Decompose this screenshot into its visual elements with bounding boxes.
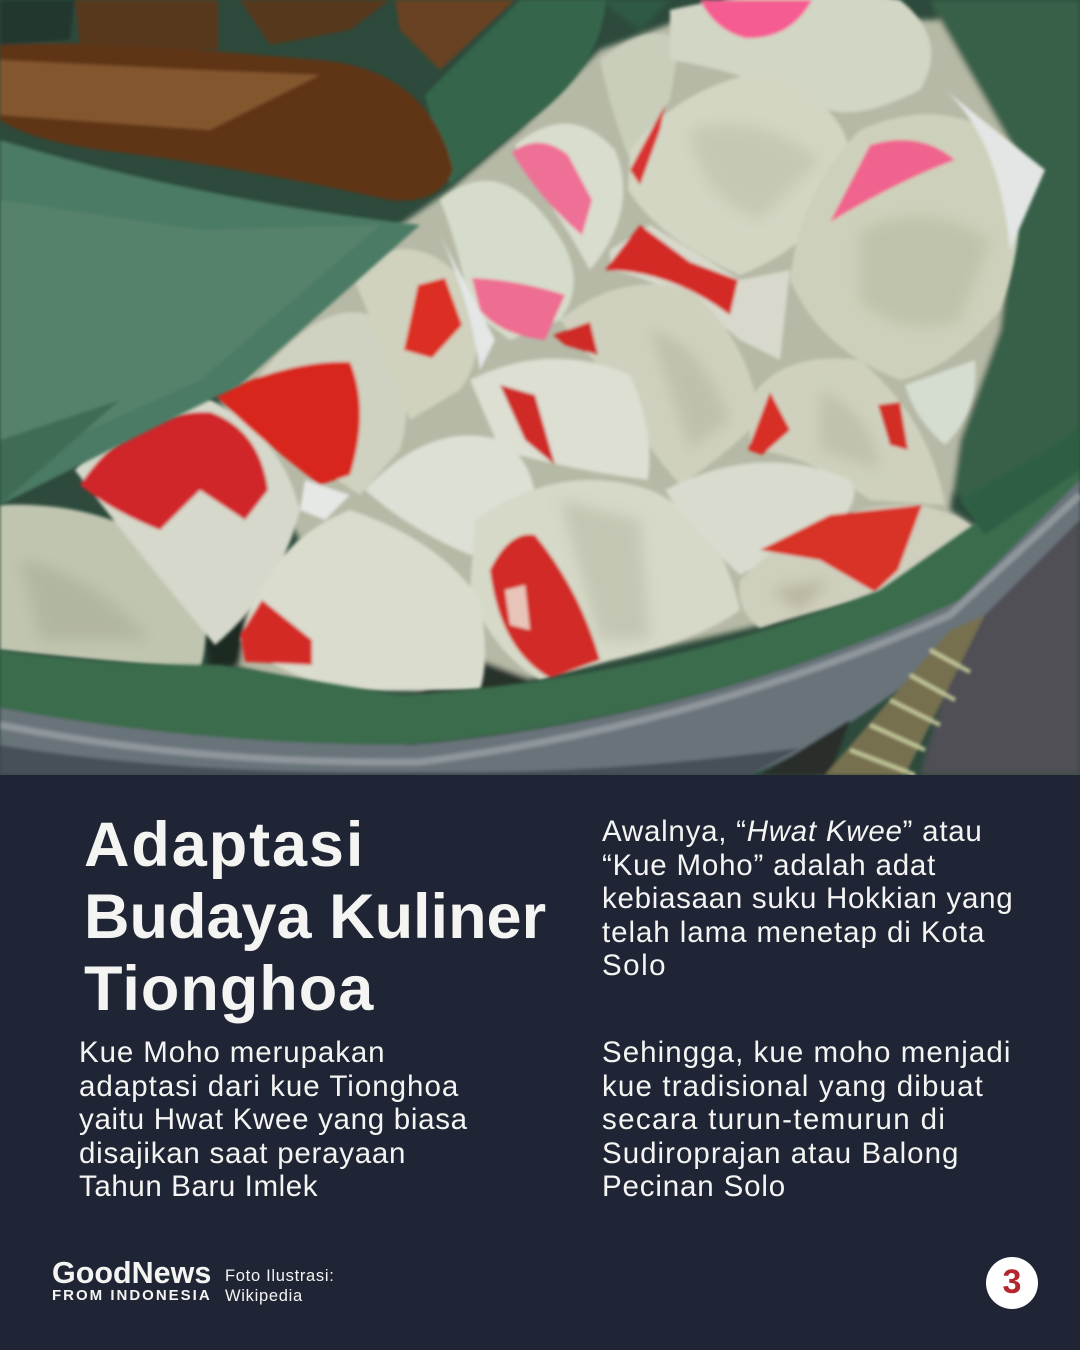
text: left paragraph [79, 1036, 468, 1203]
fried dough [0, 43, 453, 201]
logo: GoodNews from Indonesia: FROM INDONESIA [52, 1287, 212, 1304]
underfill between cakes [210, 20, 1020, 690]
text: right paragraph top [602, 815, 1013, 982]
text: right paragraph top: Solo [602, 949, 667, 982]
text: left paragraph: yaitu Hwat Kwee yang biasa [79, 1103, 468, 1136]
logo: GoodNews from Indonesia: GoodNews [52, 1256, 211, 1290]
photo: kue moho cakes in a banana leaf basket [0, 0, 1080, 775]
photo credit [225, 1267, 335, 1305]
text: right paragraph bottom: Sudiroprajan atau Balong [602, 1136, 959, 1170]
leaf bottom [0, 450, 1080, 745]
text: left paragraph: Tahun Baru Imlek [79, 1170, 318, 1203]
text: right paragraph bottom: secara turun-temurun di [602, 1103, 946, 1136]
page number badge [986, 1257, 1038, 1309]
text: right paragraph bottom: kue tradisional yang dibuat [602, 1070, 984, 1102]
cake shading [20, 124, 990, 640]
page number badge: 3 [1003, 1263, 1021, 1301]
text: right paragraph top: Awalnya, “Hwat Kwee” atau [602, 815, 983, 848]
text: right paragraph bottom: Sehingga, kue moho menjadi [602, 1036, 1011, 1069]
text: right paragraph top: kebiasaan suku Hokkian yang [602, 882, 1013, 915]
photo credit: Foto Ilustrasi: [225, 1267, 335, 1285]
photo credit: Wikipedia [225, 1287, 303, 1305]
title: Budaya Kuliner [84, 882, 546, 952]
text: right paragraph bottom: Pecinan Solo [602, 1170, 786, 1203]
cakes [0, 0, 1045, 690]
title [84, 810, 546, 1024]
text: right paragraph top: “Kue Moho” adalah adat [602, 848, 936, 882]
text: right paragraph top: telah lama menetap di Kota [602, 916, 985, 948]
title: Tionghoa [84, 954, 374, 1024]
leaf top left [0, 140, 420, 505]
text: left paragraph: disajikan saat perayaan [79, 1136, 406, 1170]
text: left paragraph: adaptasi dari kue Tionghoa [79, 1070, 459, 1102]
title: Adaptasi [84, 810, 365, 880]
text: right paragraph bottom [602, 1036, 1011, 1203]
basket rim [0, 480, 1080, 775]
mat [825, 615, 985, 775]
text: left paragraph: Kue Moho merupakan [79, 1036, 385, 1069]
